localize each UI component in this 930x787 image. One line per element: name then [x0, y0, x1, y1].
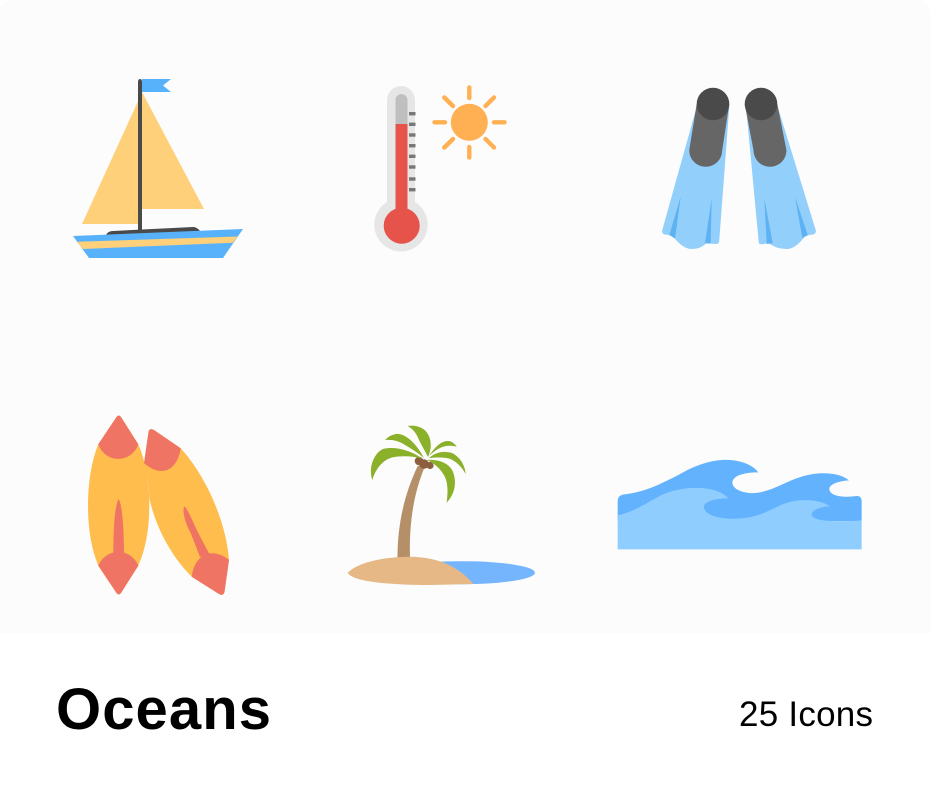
icon count label: 25 Icons: [739, 695, 873, 734]
front board: [88, 416, 149, 594]
icon: ocean waves: [618, 460, 862, 549]
sand: [348, 557, 473, 585]
icon: sun: [434, 88, 504, 158]
icon: palm tree island: [348, 426, 535, 585]
icon: thermometer: [374, 86, 428, 251]
fronds: [371, 426, 466, 503]
icon: left swim fin: [662, 88, 729, 249]
back board: [144, 429, 229, 595]
water: [389, 561, 535, 584]
coconuts: [415, 457, 434, 469]
icon: surfboards: [88, 416, 229, 595]
icon: right swim fin: [745, 88, 816, 249]
icon: sailboat: [73, 79, 243, 258]
title: Oceans: [56, 677, 271, 742]
trunk: [398, 466, 425, 558]
